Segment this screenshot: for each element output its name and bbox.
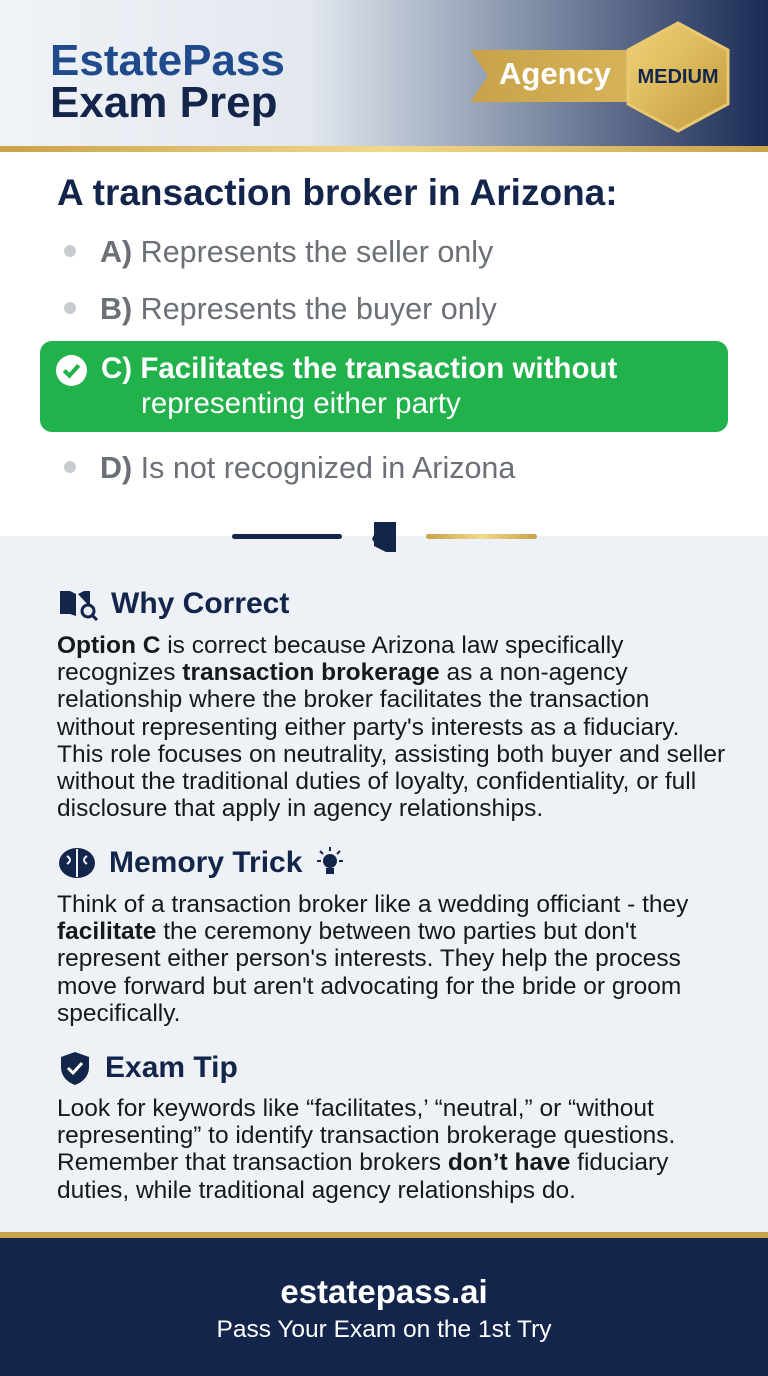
- text: memory trick: [57, 891, 688, 1027]
- text: why correct: This role focuses on neutrality, assisting both buyer and seller: [57, 741, 725, 768]
- text: memory trick: Think of a transaction broker like a wedding officiant - they: [57, 891, 688, 918]
- text: exam tip: [57, 1095, 675, 1204]
- text: memory trick: move forward but aren't advocating for the bride or groom: [57, 973, 681, 1000]
- text: why correct: without representing either party's interests as a fiduciary.: [57, 714, 679, 741]
- option C correct: C) Facilitates the transaction without: [101, 352, 617, 385]
- footer tagline: Pass Your Exam on the 1st Try: [216, 1316, 552, 1343]
- divider with Arizona icon: [232, 522, 537, 552]
- text: exam tip: Look for keywords like “facilitates,’ “neutral,” or “without: [57, 1095, 654, 1122]
- question panel: [0, 152, 768, 536]
- badge: Agency ribbon and MEDIUM hexagon: [470, 21, 730, 133]
- heading: Exam Tip: Exam Tip: [105, 1051, 238, 1084]
- option C correct: [40, 341, 728, 432]
- text: why correct: Option C is correct because Arizona law specifically: [57, 632, 623, 659]
- text: why correct: disclosure that apply in agency relationships.: [57, 795, 543, 822]
- logo text: EstatePass: [50, 36, 285, 85]
- text: why correct: recognizes transaction brokerage as a non-agency: [57, 659, 628, 686]
- text: memory trick: specifically.: [57, 1000, 180, 1027]
- text: memory trick: facilitate the ceremony between two parties but don't: [57, 918, 636, 945]
- logo text: Exam Prep: [50, 78, 277, 127]
- text: why correct: relationship where the broker facilitates the transaction: [57, 686, 649, 713]
- heading: Memory Trick: [59, 846, 343, 879]
- question title: A transaction broker in Arizona:: [57, 172, 618, 213]
- footer: [0, 1232, 768, 1376]
- text: exam tip: representing” to identify transaction brokerage questions.: [57, 1122, 675, 1149]
- text: exam tip: Remember that transaction brokers don’t have fiduciary: [57, 1149, 668, 1176]
- text: why correct: [57, 632, 725, 822]
- heading: Why Correct: Why Correct: [111, 587, 289, 620]
- text: exam tip: duties, while traditional agency relationships do.: [57, 1177, 576, 1204]
- text: memory trick: represent either person's interests. They help the process: [57, 945, 681, 972]
- option C correct: representing either party: [141, 387, 461, 420]
- option B: B) Represents the buyer only: [100, 292, 497, 326]
- logo text: [50, 36, 285, 127]
- badge: Agency ribbon and MEDIUM hexagon: MEDIUM: [637, 66, 719, 88]
- option A: A) Represents the seller only: [100, 235, 493, 269]
- header: [0, 0, 768, 146]
- footer site: estatepass.ai: [280, 1273, 488, 1310]
- text: why correct: without the traditional duties of loyalty, confidentiality, or full: [57, 768, 696, 795]
- heading: Memory Trick: Memory Trick: [109, 846, 302, 879]
- option D: D) Is not recognized in Arizona: [100, 451, 515, 485]
- badge: Agency ribbon and MEDIUM hexagon: Agency: [499, 56, 611, 91]
